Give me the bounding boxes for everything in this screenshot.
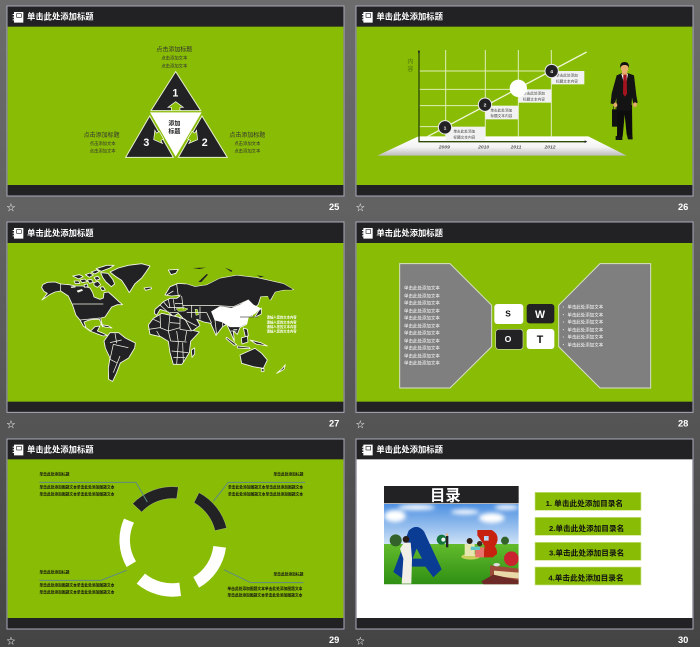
year labels [438,144,556,150]
Arctic islands [73,265,115,291]
page footer: 30 [678,635,688,645]
page footer [7,418,339,429]
Asian islands [226,308,267,349]
axes [418,51,587,143]
menu button 2: 2.单击此处添加目录名 [549,523,624,533]
panel: slide 27 world map [7,222,344,429]
South America [104,333,135,381]
text block bottom left: 单击此处添加图题文本单击此处添加图题文本 [39,583,115,588]
page footer [356,418,688,429]
page footer: ☆ [7,203,16,213]
text block bottom left: 单击此处添加标题 [39,569,70,574]
grid lines [419,50,551,137]
caption right [229,131,265,154]
left list panel: 单击此处添加文本 [404,337,440,344]
caption left [84,131,120,154]
text block top right: 单击此处添加图题文本单击此处添加图题文本 [228,491,303,496]
ring segment white left [119,519,136,567]
O tile: O [505,334,512,344]
ring segment white bottom [137,574,181,597]
ring segment dark top [133,487,178,512]
slide header: 单击此处添加标题 [27,445,94,455]
triangle 1: 1 [172,87,178,99]
China highlight [212,300,260,327]
page footer: ☆ [356,636,365,646]
menu button 1: 1. 单击此处添加目录名 [546,498,623,508]
callout 4: 标题文本内容 [556,78,578,83]
caption top [156,45,192,69]
right list panel: 单击此处添加文本 [567,304,604,311]
text block bottom left: 单击此处添加图题文本单击此处添加图题文本 [39,589,115,594]
ring segment dark right [194,493,227,531]
caption right: 点击添加标题 [229,131,265,139]
callout 1: 单击此处添加 [453,128,476,133]
left list panel: 单击此处添加文本 [404,285,440,292]
axis label: 容 [407,65,413,73]
year labels: 2012 [543,144,556,150]
left list panel: 单击此处添加文本 [404,292,440,299]
text block bottom right [227,571,304,598]
map legend text: 请输入您的文本内容 [267,329,297,334]
text block bottom right: 单击此处添加图题文本单击此处添加图题文本 [227,586,303,591]
centre triangle [150,112,202,157]
page footer [7,635,339,646]
right list panel: 单击此处添加文本 [567,319,604,326]
map legend text: 请输入您的文本内容 [267,314,297,319]
callout 1: 1 [444,125,447,131]
trend line [427,52,587,137]
caption left: 点击添加文本 [90,147,116,154]
Eurasia [154,275,293,341]
S tile [494,304,523,324]
centre triangle: 标题 [168,127,180,135]
Korea line [240,316,258,318]
right list panel: 单击此处添加文本 [567,311,604,318]
callout 4 [545,64,584,84]
caption top: 点击添加文本 [161,62,188,69]
menu button 1 [535,492,641,510]
ring segment white lower right [193,546,226,588]
North America [42,282,123,336]
callout 2: 标题文本内容 [490,113,513,118]
triangle 3: 3 [143,137,149,149]
panel: slide 28 SWOT [356,222,693,429]
contents heading bar [384,486,519,505]
caption left: 点击添加标题 [84,131,120,139]
Arctic Russia islands [193,268,264,282]
slide header: 单击此处添加标题 [27,12,94,22]
left list panel: 单击此处添加文本 [404,345,440,352]
text block top left: 单击此处添加图题文本单击此处添加图题文本 [39,485,115,490]
right list panel: 单击此处添加文本 [567,326,604,333]
panel: slide 30 table of contents [356,439,693,646]
Africa and Madagascar [148,313,199,364]
left list panel: 单击此处添加文本 [404,360,440,367]
text block top left: 单击此处添加标题 [39,471,70,476]
country borders [61,283,248,373]
left list panel: 单击此处添加文本 [404,315,440,322]
lakes of Canada [71,286,83,293]
world map [42,264,293,381]
left list panel: 单击此处添加文本 [404,352,440,359]
left list panel [400,264,492,388]
menu button 2 [535,517,641,535]
axis label [407,57,413,73]
inland seas [176,308,199,315]
text block bottom left [39,569,115,594]
map legend text [267,314,297,334]
callout 1: 标题文本内容 [453,134,476,139]
W tile: W [535,309,546,321]
caption right: 点击添加文本 [234,140,261,147]
left list panel: 单击此处添加文本 [404,300,440,307]
right list panel: 单击此处添加文本 [567,341,604,348]
text block top left [39,471,115,496]
right list panel: 单击此处添加文本 [567,334,604,341]
triangle 1 [151,72,201,111]
left list panel: 单击此处添加文本 [404,330,440,337]
callout 4: 4 [550,69,553,75]
left list panel: 单击此处添加文本 [404,322,440,329]
page footer: ☆ [356,203,365,213]
menu button 4: 4.单击此处添加目录名 [548,573,624,583]
callout 4: 单击此处添加 [556,73,578,78]
page footer: 27 [329,418,339,428]
year labels: 2009 [438,144,450,150]
right list panel [559,264,651,388]
page footer [356,202,688,213]
panel: slide 25 triangle diagram [7,6,344,213]
triangle 2 [178,116,227,157]
callout 2: 2 [484,103,487,109]
W tile [527,304,554,323]
slide header: 单击此处添加标题 [27,228,94,238]
page footer [7,202,339,213]
map legend text: 请输入您的文本内容 [267,319,297,324]
leader lines [39,482,305,583]
axis label: 内 [407,57,413,65]
illustration: children and letters [384,504,519,584]
caption top: 点击添加标题 [156,45,192,53]
Greenland and Iceland [110,264,152,293]
slide header: 单击此处添加标题 [376,228,444,238]
centre triangle: 添加 [168,120,180,128]
callout 2 [478,98,518,119]
triangle 3 [126,116,173,157]
left list panel: 单击此处添加文本 [404,307,440,314]
Caribbean [101,269,178,328]
caption right: 点击添加文本 [234,147,261,154]
Oceania [240,348,285,373]
triangle 2: 2 [202,137,208,149]
panel: slide 29 ring diagram [7,439,344,646]
T tile [527,329,554,349]
callout 3: 标题文本内容 [523,96,545,101]
text block top right: 单击此处添加标题 [273,471,304,476]
businessman with briefcase [611,62,638,140]
page footer [356,635,688,646]
platform [377,136,627,156]
caption top: 点击添加文本 [161,55,188,62]
page footer: ☆ [356,419,365,429]
slide header: 单击此处添加标题 [376,445,444,455]
text block top right [228,471,304,496]
map legend text: 请输入您的文本内容 [267,324,297,329]
text block bottom right: 单击此处添加标题 [273,571,304,576]
page footer: 28 [678,418,688,428]
menu button 3 [535,542,641,560]
page footer: ☆ [7,419,16,429]
S tile: S [505,309,511,319]
callout 3: 单击此处添加 [523,91,545,96]
Russia dark mass [181,276,292,308]
menu button 3: 3.单击此处添加目录名 [549,548,624,558]
menu button 4 [535,567,641,585]
year labels: 2010 [477,144,489,150]
callout 1 [438,121,485,141]
slide header: 单击此处添加标题 [376,12,444,22]
text block top right: 单击此处添加图题文本单击此处添加图题文本 [228,485,303,490]
text block top left: 单击此处添加图题文本单击此处添加图题文本 [39,491,115,496]
page footer: 25 [329,202,339,212]
T tile: T [537,334,544,346]
year labels: 2011 [510,144,522,150]
caption left: 点击添加文本 [90,140,116,147]
contents heading bar: 目录 [430,488,461,505]
page footer: 29 [329,635,339,645]
callout 3 [510,80,551,103]
panel: slide 26 growth chart [356,6,693,213]
callout 2: 单击此处添加 [490,107,513,112]
O tile [496,329,523,349]
text block bottom right: 单击此处添加图题文本单击此处添加图题文本 [227,593,303,598]
page footer: 26 [678,202,688,212]
page footer: ☆ [7,636,16,646]
